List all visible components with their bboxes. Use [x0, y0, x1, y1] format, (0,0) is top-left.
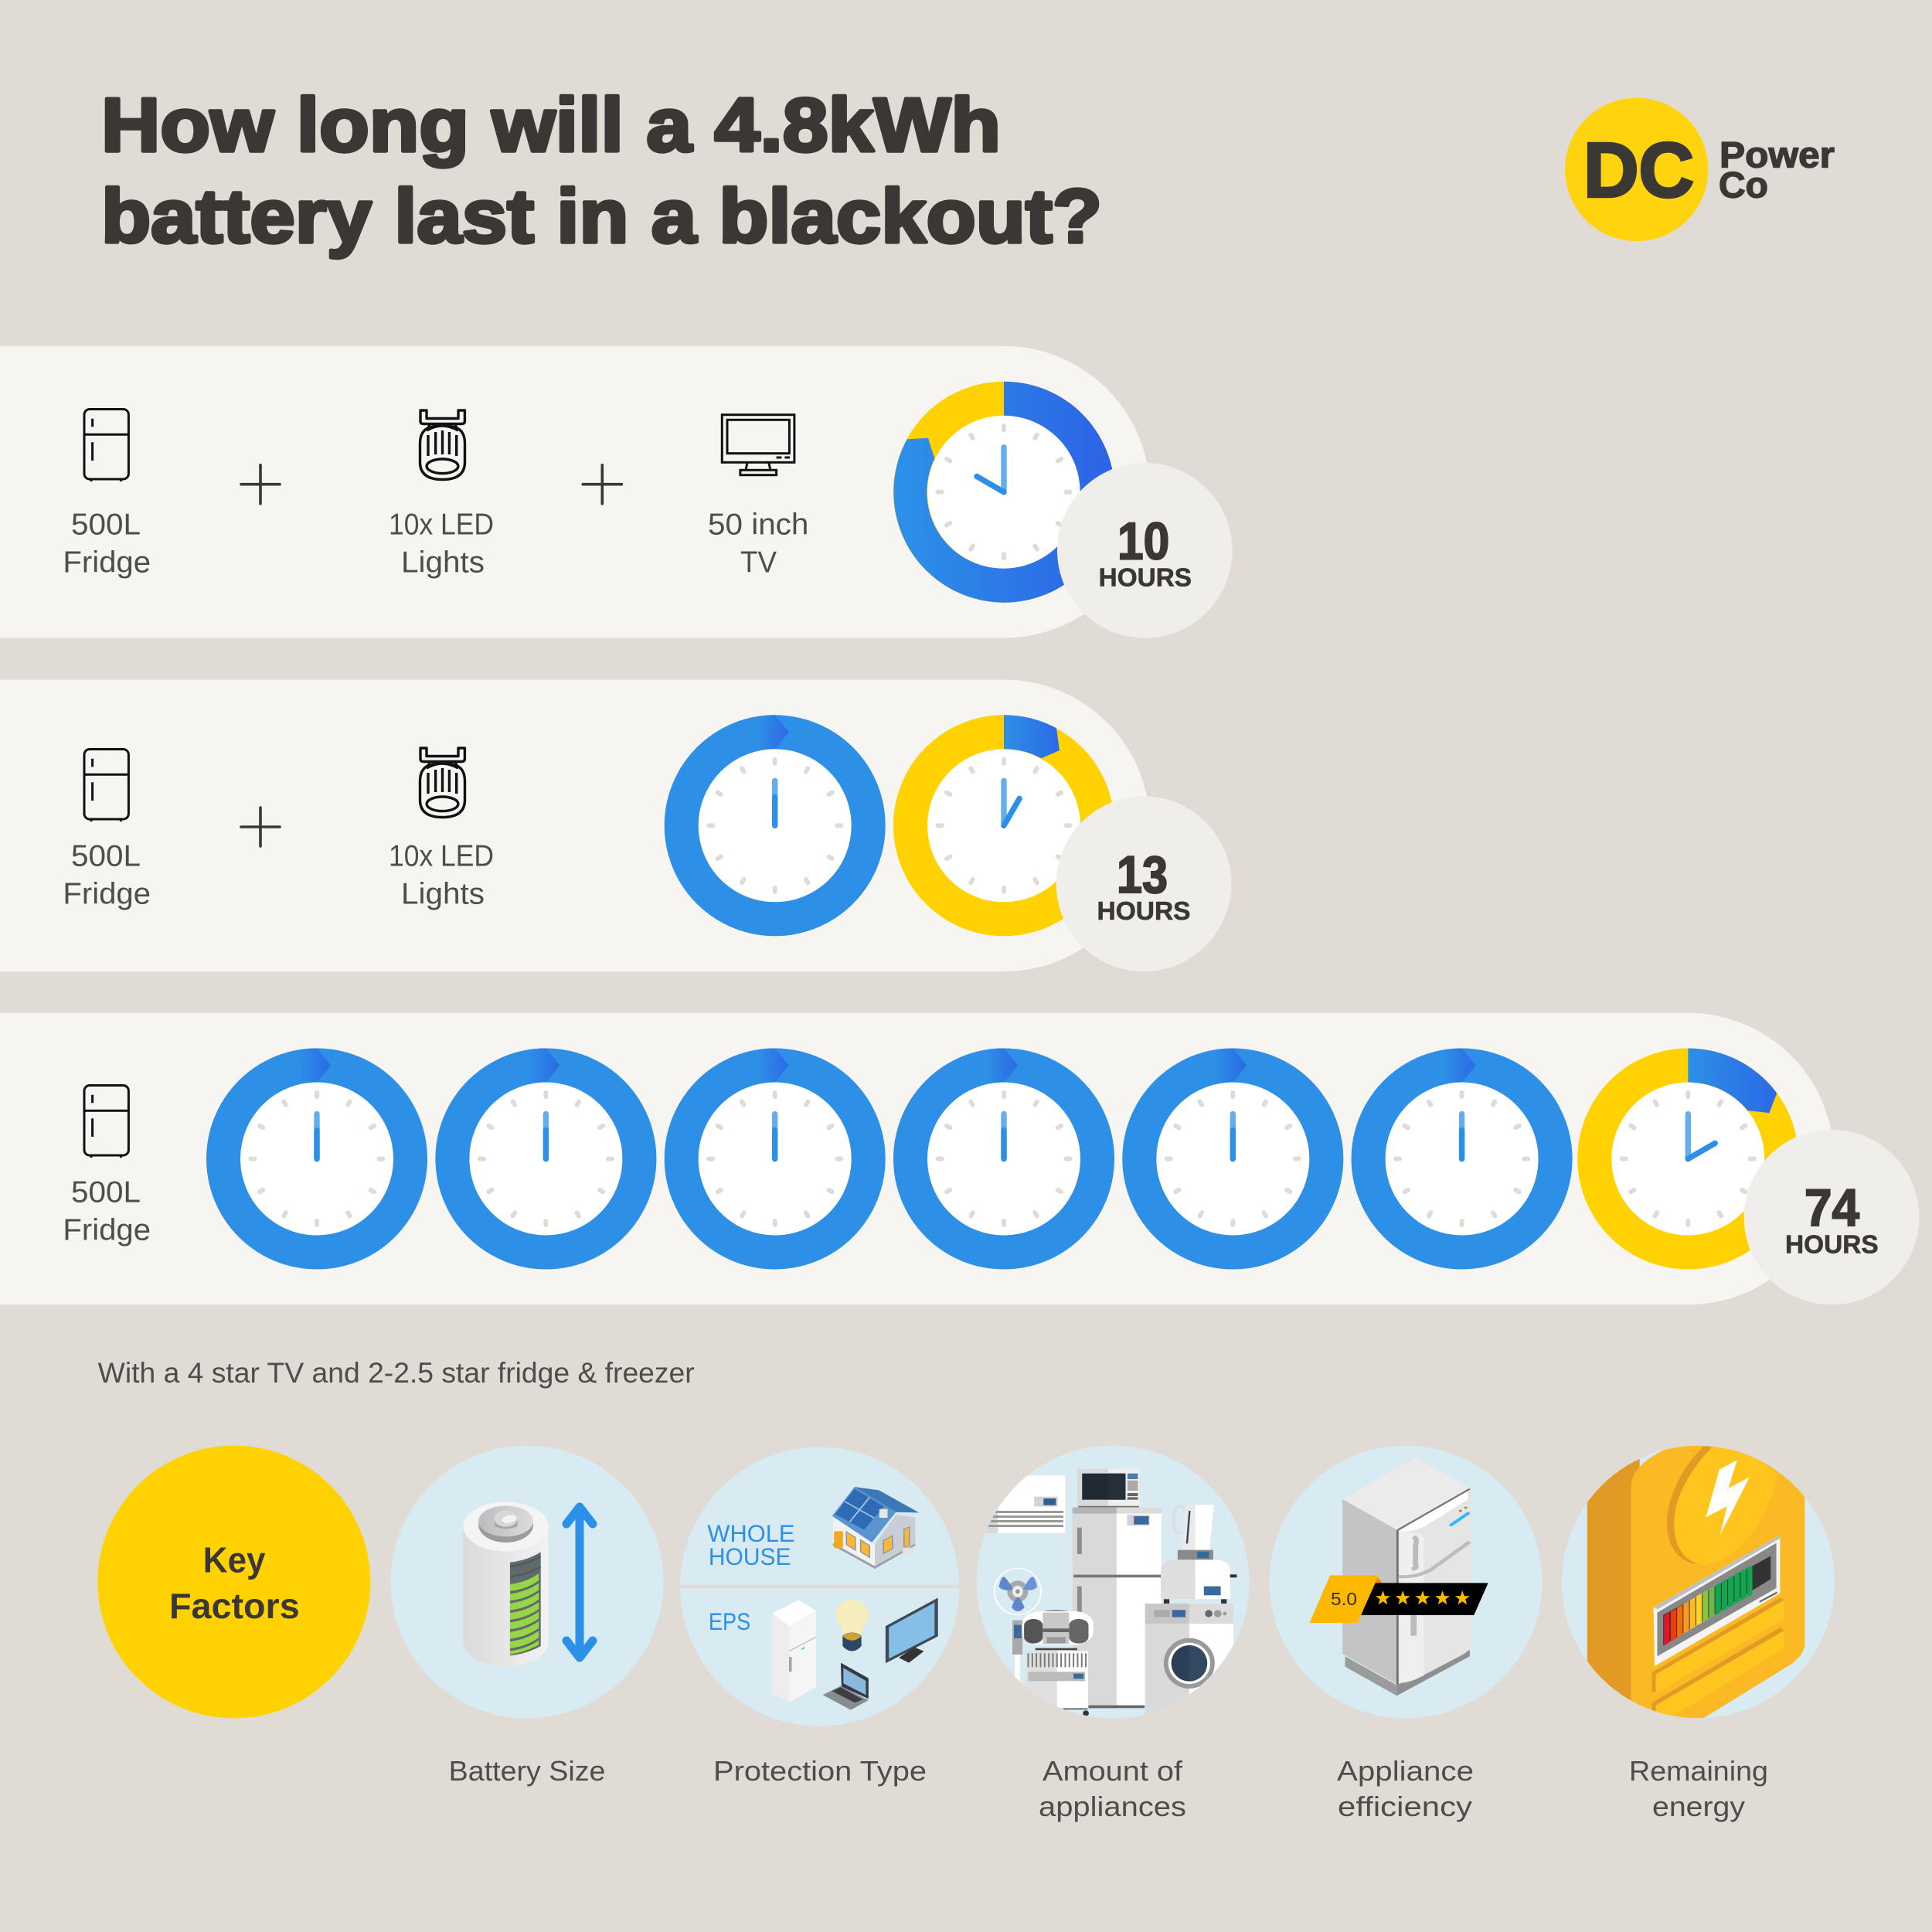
- icon: LED light: [420, 748, 465, 818]
- label: 10x LED Lights: [389, 840, 494, 911]
- label: 500L Fridge: Fridge: [63, 1214, 151, 1247]
- label: 10x LED Lights: 10x LED: [389, 509, 494, 542]
- label: 50 inch TV: 50 inch: [708, 509, 808, 542]
- panel: fridge only: [0, 1013, 1919, 1304]
- badge: 13 hours: HOURS: [1097, 896, 1190, 925]
- label: appliance efficiency: efficiency: [1338, 1791, 1473, 1822]
- icon: TV: [722, 415, 794, 475]
- factor: amount of appliances: [977, 1445, 1249, 1719]
- label: whole house: WHOLE: [707, 1519, 794, 1547]
- label: battery size: Battery Size: [449, 1755, 606, 1787]
- label: appliance efficiency: Appliance: [1337, 1755, 1474, 1787]
- label: amount of appliances: Amount of: [1043, 1755, 1183, 1787]
- heading circle: Key Factors: [97, 1445, 370, 1719]
- badge: 13 hours: [1056, 796, 1231, 971]
- heading circle: Key Factors: Key: [203, 1540, 266, 1580]
- title: [101, 82, 1102, 258]
- clock: 1 extra hour: [910, 715, 1097, 919]
- footnote: With a 4 star TV and 2-2.5 star fridge & freezer: [98, 1357, 695, 1389]
- label: remaining energy: [1629, 1755, 1768, 1822]
- badge: 13 hours: 13: [1117, 845, 1168, 904]
- icon: fridge: [84, 1085, 128, 1158]
- badge: 10 hours: [1057, 463, 1233, 638]
- label: 500L Fridge: Fridge: [63, 546, 151, 580]
- label: 500L Fridge: [63, 1176, 151, 1247]
- plus sign: [241, 808, 280, 846]
- label: whole house: HOUSE: [709, 1543, 791, 1570]
- microwave: [1077, 1469, 1139, 1508]
- blender: [1174, 1505, 1214, 1560]
- icon: group of household appliances: [987, 1469, 1236, 1717]
- label: EPS: EPS: [709, 1607, 750, 1635]
- factor labels: [449, 1755, 1768, 1822]
- washing machine: [1145, 1604, 1233, 1717]
- clocks: six full cycles: [223, 1048, 1556, 1252]
- rating: 5.0: 5.0: [1331, 1589, 1357, 1609]
- icon: double-headed arrow: [566, 1507, 593, 1658]
- label: 10x LED Lights: 10x LED: [389, 840, 494, 873]
- badge: 74 hours: [1744, 1130, 1919, 1304]
- factor: remaining energy: [1562, 1443, 1835, 1721]
- label: 500L Fridge: 500L: [71, 509, 141, 542]
- title: battery last in a blackout?: [101, 173, 1102, 258]
- clock: 2 extra hours: [1594, 1048, 1781, 1252]
- boombox: [1022, 1610, 1094, 1650]
- plus sign: [583, 465, 621, 504]
- icon: fridge: [84, 750, 128, 821]
- label: remaining energy: energy: [1652, 1791, 1746, 1822]
- heater: [1026, 1651, 1089, 1716]
- rating: five stars: [1376, 1590, 1470, 1604]
- logo: DC Power Co: Power: [1719, 134, 1835, 175]
- label: remaining energy: Remaining: [1629, 1755, 1768, 1787]
- plus sign: [241, 465, 280, 504]
- label: 500L Fridge: 500L: [71, 1176, 141, 1209]
- tall fridge: [1073, 1508, 1162, 1709]
- logo: DC Power Co: DC: [1583, 127, 1694, 213]
- badge: 10 hours: HOURS: [1099, 563, 1192, 592]
- badge: 74 hours: 74: [1804, 1179, 1859, 1237]
- label: amount of appliances: [1039, 1755, 1186, 1822]
- panel: fridge, lights and TV: [0, 346, 1233, 638]
- icon: battery unit with charge meter: [1587, 1443, 1804, 1721]
- clock: 10 hours: [893, 382, 1114, 603]
- logo: DC Power Co: [1565, 98, 1835, 241]
- icon: fridge, bulb, monitor and laptop: [772, 1600, 937, 1710]
- panel: fridge and lights: [0, 680, 1231, 971]
- heading circle: Key Factors: Factors: [169, 1586, 300, 1626]
- icon: LED light: [420, 410, 465, 479]
- label: protection type: Protection Type: [713, 1755, 927, 1787]
- icon: solar house: [832, 1487, 919, 1569]
- label: 50 inch TV: [708, 509, 808, 580]
- label: 500L Fridge: Fridge: [63, 878, 151, 911]
- toaster: [1161, 1560, 1236, 1604]
- air conditioner: [987, 1475, 1065, 1533]
- factor: appliance efficiency: [1269, 1445, 1543, 1719]
- icon: fridge: [84, 410, 128, 481]
- label: appliance efficiency: [1337, 1755, 1474, 1822]
- title: How long will a 4.8kWh: [101, 82, 1001, 167]
- icon: battery: [463, 1502, 549, 1667]
- label: 10x LED Lights: [389, 509, 494, 580]
- label: 500L Fridge: 500L: [71, 840, 141, 873]
- label: 10x LED Lights: Lights: [401, 546, 485, 580]
- badge: 10 hours: 10: [1117, 512, 1169, 570]
- label: 500L Fridge: [63, 840, 151, 911]
- label: whole house: [707, 1519, 794, 1570]
- clock: full 12 hours: [682, 715, 869, 919]
- badge: 74 hours: HOURS: [1785, 1230, 1879, 1259]
- icon: isometric fridge: [1309, 1458, 1488, 1696]
- label: 50 inch TV: TV: [740, 546, 777, 580]
- desk fan: [995, 1568, 1041, 1688]
- factor: battery size: [391, 1445, 663, 1719]
- logo: DC Power Co: Co: [1719, 164, 1768, 206]
- label: 500L Fridge: [63, 509, 151, 580]
- label: 10x LED Lights: Lights: [401, 878, 485, 911]
- factor: protection type: [679, 1447, 961, 1726]
- label: amount of appliances: appliances: [1039, 1791, 1186, 1822]
